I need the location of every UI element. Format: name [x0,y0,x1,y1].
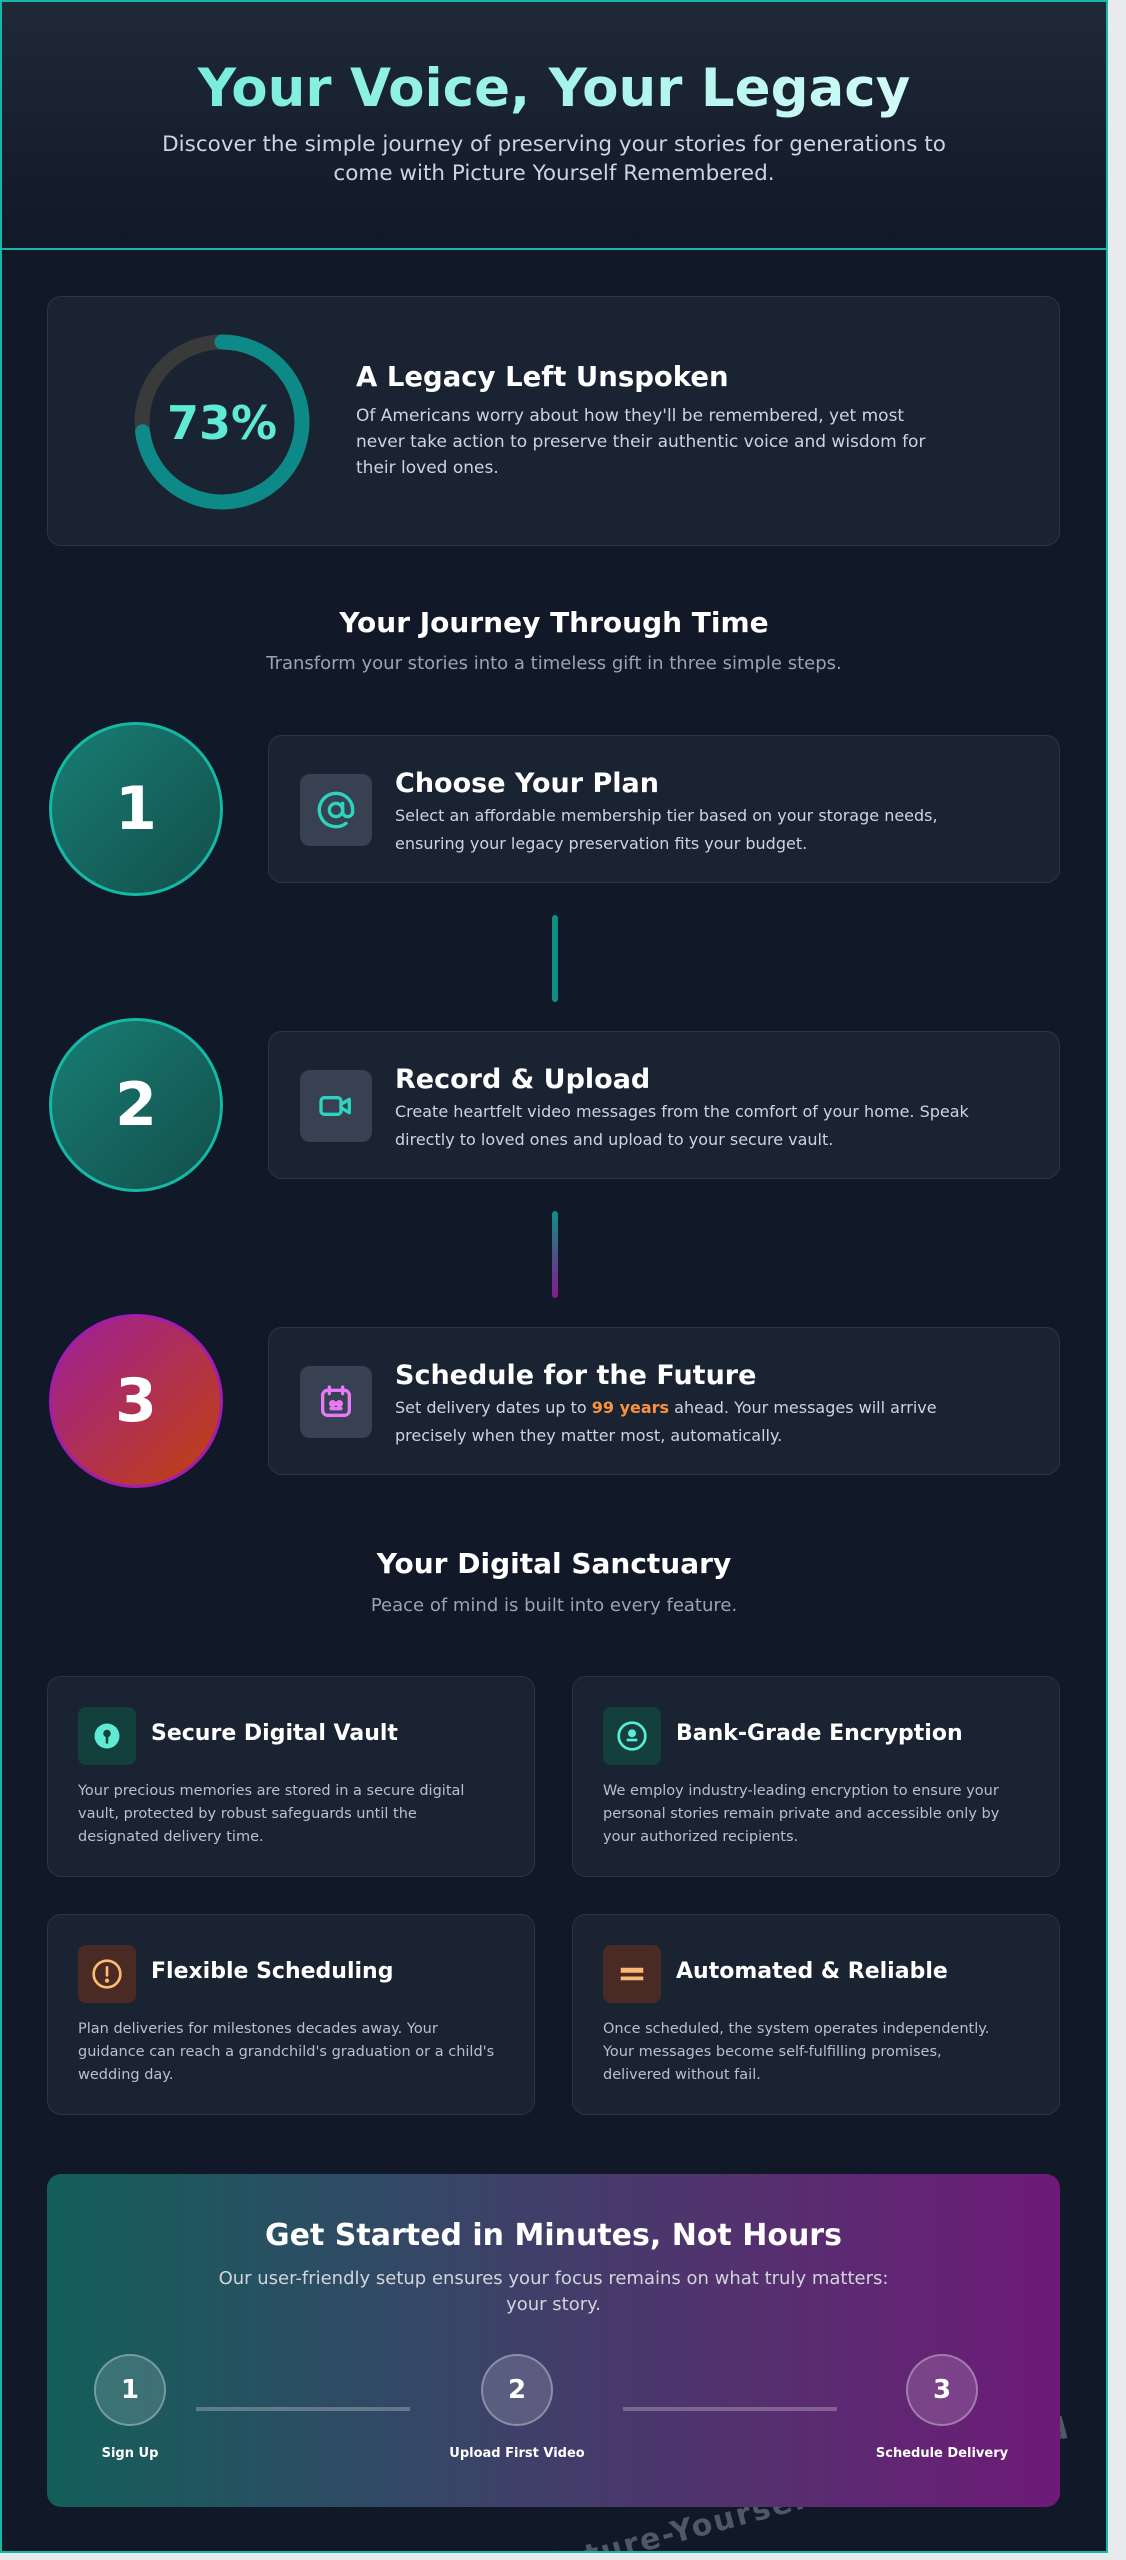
icon: at [300,774,372,846]
subheading: journey: Transform your stories into a timeless gift in three simple steps. [266,653,842,674]
CTA step 1 [94,2354,166,2461]
step 1 card: Select an affordable membership tier based on your storage needs, ensuring your legacy preservation fits your budget. [395,806,938,853]
CTA step line 1 [196,2407,410,2411]
donut chart 73% [134,334,310,510]
step 1 card [268,735,1060,883]
icon: scheduling [78,1945,136,2003]
CTA step 3: Schedule Delivery [876,2446,1008,2461]
CTA step 2 [449,2354,585,2461]
CTA title: Get Started in Minutes, Not Hours [265,2218,842,2253]
step 2 circle: 2 [115,1070,157,1140]
step 2 card [268,1031,1060,1179]
CTA step 1: 1 [121,2375,139,2405]
heading: sanctuary: Your Digital Sanctuary [377,1547,731,1580]
feature: automated: Automated & Reliable [676,1959,948,1984]
feature: scheduling: Flexible Scheduling [151,1959,393,1984]
CTA step 3: 3 [933,2375,951,2405]
feature: encryption [572,1676,1060,1877]
icon: calendar [300,1366,372,1438]
step 3 circle: 3 [115,1366,157,1436]
step 2 card: Record & Upload [395,1064,650,1095]
CTA step 2: 2 [508,2375,526,2405]
feature: vault: Your precious memories are stored in a secure digital vault, protected by robust safeguards until the designated delivery time. [78,1783,464,1845]
feature: encryption: Bank-Grade Encryption [676,1721,963,1746]
stat heading: A Legacy Left Unspoken [356,361,729,393]
CTA text: Our user-friendly setup ensures your focus remains on what truly matters: your story. [219,2268,888,2315]
step 2 card: Create heartfelt video messages from the comfort of your home. Speak directly to loved ones and upload to your secure vault. [395,1102,969,1149]
CTA step line 2 [623,2407,837,2411]
connector 1 [552,915,558,1002]
feature: scheduling [47,1914,535,2115]
step 3 circle [49,1314,223,1488]
title [2,56,1106,122]
feature: vault [47,1676,535,1877]
subtitle: Discover the simple journey of preserving your stories for generations to come with Picture Yourself Remembered. [162,132,946,186]
icon: encryption [603,1707,661,1765]
feature: encryption: We employ industry-leading encryption to ensure your personal stories remain private and accessible only by your authorized recipients. [603,1783,999,1845]
CTA step 2: Upload First Video [449,2446,585,2461]
feature: automated: Once scheduled, the system operates independently. Your messages become self-fulfilling promises, delivered without fail. [603,2021,989,2083]
icon: vault [78,1707,136,1765]
title: Your Voice, Your Legacy [198,58,910,119]
CTA step 3 [876,2354,1008,2461]
step 3 card: Schedule for the Future [395,1360,756,1391]
step 1 card: Choose Your Plan [395,768,659,799]
panel: stat [47,296,1060,546]
donut chart 73%: 73% [167,396,277,450]
stat text: Of Americans worry about how they'll be remembered, yet most never take action to preserve their authentic voice and wisdom for their loved ones. [356,406,925,478]
feature: automated [572,1914,1060,2115]
step 3 card: Set delivery dates up to 99 years ahead. Your messages will arrive precisely when they matter most, automatically. [395,1398,937,1445]
CTA step 1: Sign Up [102,2446,158,2461]
CTA panel [47,2174,1060,2507]
step 1 circle: 1 [115,774,157,844]
icon: automated [603,1945,661,2003]
subheading: sanctuary: Peace of mind is built into every feature. [371,1595,737,1616]
feature: vault: Secure Digital Vault [151,1721,398,1746]
header [2,2,1106,250]
heading: journey: Your Journey Through Time [339,606,769,639]
step 1 circle [49,722,223,896]
connector 2 [552,1211,558,1298]
step 2 circle [49,1018,223,1192]
step 3 card [268,1327,1060,1475]
feature: scheduling: Plan deliveries for milestones decades away. Your guidance can reach a grandchild's graduation or a child's wedding day. [78,2021,494,2083]
icon: video [300,1070,372,1142]
